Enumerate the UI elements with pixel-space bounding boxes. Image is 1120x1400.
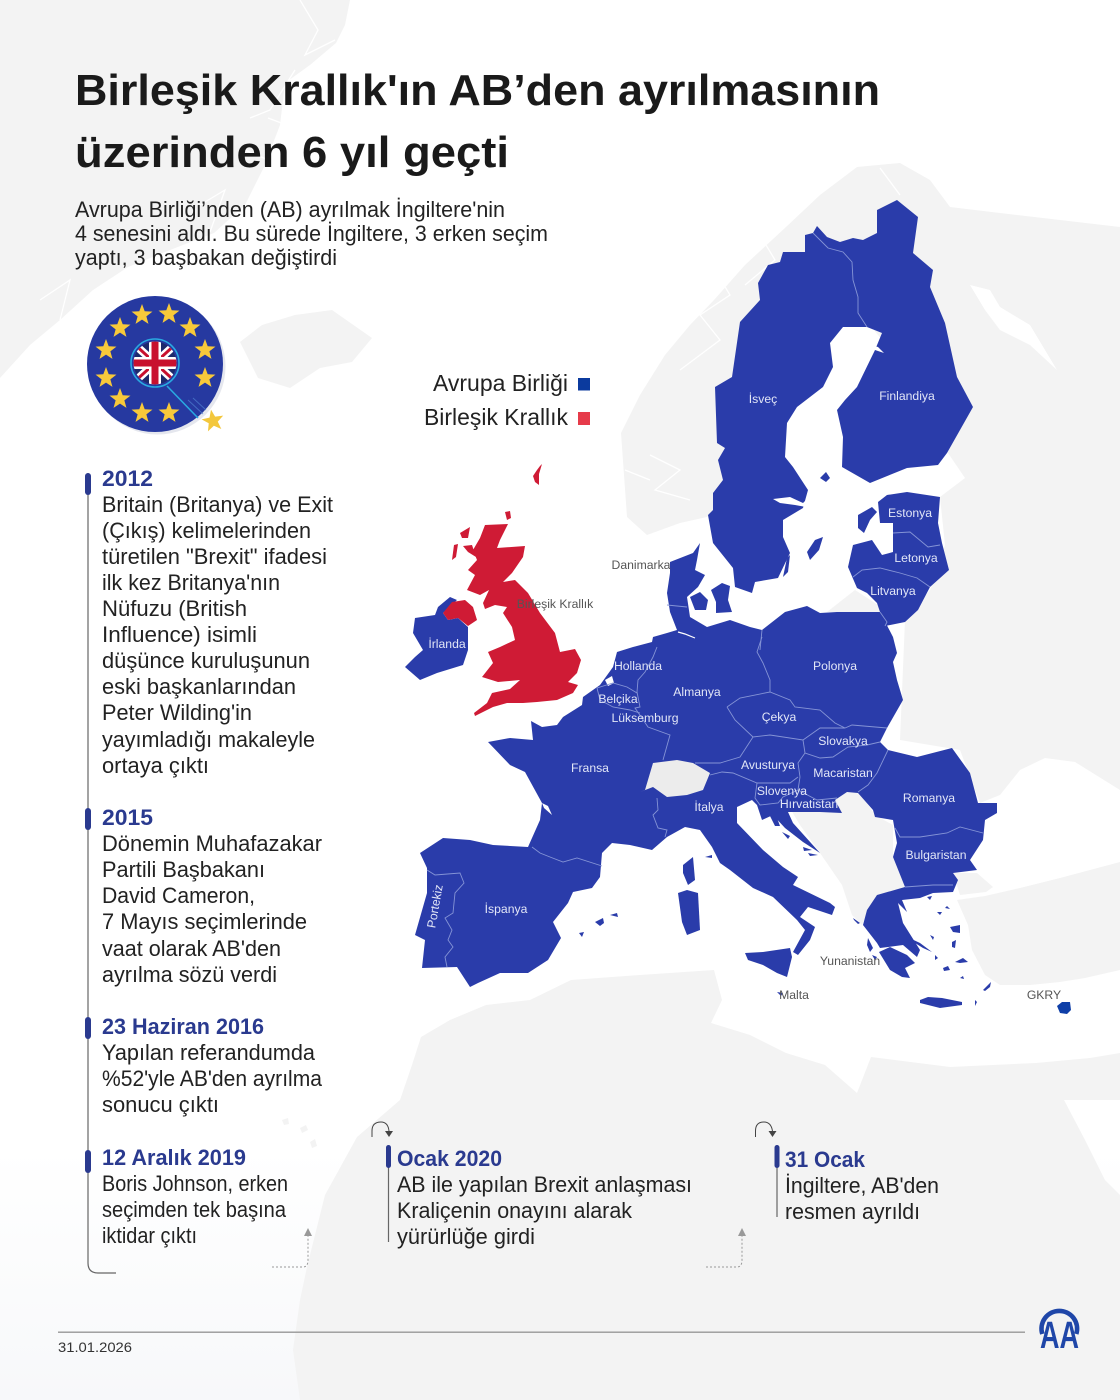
map: country labels: Almanya (673, 685, 721, 699)
map: country labels: Slovenya (757, 784, 807, 798)
map: country labels: Macaristan (813, 766, 873, 780)
timeline item: Ocak 2020: AB ile yapılan Brexit anlaşması (397, 1172, 692, 1197)
timeline item: 2012: ilk kez Britanya'nın (102, 570, 280, 595)
timeline item: 2015: Dönemin Muhafazakar (102, 831, 322, 856)
map: country labels: Portekiz (424, 883, 446, 929)
map: country labels: Birleşik Krallık (517, 597, 594, 611)
title: Birleşik Krallık'ın AB’den ayrılmasının (75, 66, 880, 115)
arrow: curved to Ocak 2020 (372, 1122, 393, 1137)
timeline item: 2012: (Çıkış) kelimelerinden (102, 518, 311, 543)
timeline item: Ocak 2020: Ocak 2020 (397, 1146, 502, 1171)
map: Switzerland (640, 760, 710, 797)
map: Northern Ireland (443, 600, 477, 626)
intro text: yaptı, 3 başbakan değiştirdi (75, 245, 337, 270)
timeline item: 2015: Partili Başbakanı (102, 857, 265, 882)
timeline item: 2012 (85, 466, 333, 778)
map: country labels: Romanya (903, 791, 955, 805)
timeline item: 2012: düşünce kuruluşunun (102, 648, 310, 673)
timeline item: 2012: Nüfuzu (British (102, 596, 247, 621)
map: country labels: İsveç (749, 392, 777, 406)
map: country labels (424, 389, 1061, 1002)
timeline item: 23 Haziran 2016 (85, 1014, 323, 1117)
timeline item: 2012: Peter Wilding'in (102, 700, 252, 725)
map: Baltic states (848, 492, 949, 626)
logo: AA: AA (1040, 1315, 1079, 1357)
timeline item: 23 Haziran 2016: 23 Haziran 2016 (102, 1014, 264, 1039)
timeline item: 2012: Britain (Britanya) ve Exit (102, 492, 333, 517)
map: country labels: Hırvatistan (780, 797, 838, 811)
intro text: 4 senesini aldı. Bu sürede İngiltere, 3 erken seçim (75, 221, 548, 246)
icon: EU flag circle with magnified UK flag (87, 296, 226, 434)
timeline item: 2012: Influence) isimli (102, 622, 257, 647)
timeline item: 2012: yayımladığı makaleyle (102, 727, 315, 752)
map: country labels: İspanya (485, 902, 528, 916)
timeline item: 31 Ocak: resmen ayrıldı (785, 1199, 920, 1224)
legend: Avrupa Birliği (433, 370, 568, 396)
map: country labels: Hollanda (614, 659, 662, 673)
map: United Kingdom (443, 464, 581, 716)
map: country labels: Litvanya (870, 584, 916, 598)
timeline item: 23 Haziran 2016: Yapılan referandumda (102, 1040, 316, 1065)
timeline item: 2015 (85, 805, 322, 987)
timeline item: 23 Haziran 2016: %52'yle AB'den ayrılma (102, 1066, 323, 1091)
timeline item: 2015: vaat olarak AB'den (102, 936, 281, 961)
map: country labels: Slovakya (818, 734, 868, 748)
arrow: curved to 31 Ocak (756, 1122, 776, 1137)
map: country labels: Letonya (894, 551, 938, 565)
timeline rail (88, 473, 116, 1273)
timeline item: 31 Ocak: İngiltere, AB'den (785, 1173, 939, 1198)
timeline item: Ocak 2020: Kraliçenin onayını alarak (397, 1198, 633, 1223)
map: EU islands (579, 472, 1071, 1014)
timeline item: 12 Aralık 2019: Boris Johnson, erken (102, 1171, 288, 1196)
map: country borders (427, 233, 983, 967)
map: country labels: Fransa (571, 761, 609, 775)
map: country labels: Bulgaristan (906, 848, 966, 862)
timeline item: 31 Ocak: 31 Ocak (785, 1147, 866, 1172)
footer rule (58, 1332, 1025, 1333)
map: Shetland Orkney Hebrides (533, 464, 542, 485)
timeline item: 2015: 7 Mayıs seçimlerinde (102, 909, 307, 934)
timeline item: 12 Aralık 2019: seçimden tek başına (102, 1197, 287, 1222)
arrow: dotted connector to 31 Ocak (706, 1228, 746, 1267)
legend: Birleşik Krallık (424, 404, 568, 430)
timeline item: 12 Aralık 2019: 12 Aralık 2019 (102, 1145, 246, 1170)
map: country labels: Danimarka (612, 558, 671, 572)
timeline item: 2015: David Cameron, (102, 883, 255, 908)
intro text: Avrupa Birliği’nden (AB) ayrılmak İngiltere'nin (75, 197, 505, 222)
map: Ireland (405, 597, 468, 680)
map: Sweden and Finland (708, 200, 973, 593)
map: country labels: Estonya (888, 506, 932, 520)
timeline item: 2012: 2012 (102, 466, 153, 491)
timeline item: 12 Aralık 2019: iktidar çıktı (102, 1223, 197, 1248)
map: country labels: GKRY (1027, 988, 1061, 1002)
timeline item: 2012: eski başkanlarından (102, 674, 296, 699)
title (75, 66, 880, 177)
timeline item: 23 Haziran 2016: sonucu çıktı (102, 1092, 219, 1117)
map: country labels: Çekya (762, 710, 796, 724)
map: country labels: Finlandiya (879, 389, 935, 403)
map: country labels: İtalya (694, 800, 724, 814)
title: üzerinden 6 yıl geçti (75, 128, 509, 177)
footer date: 31.01.2026 (58, 1339, 132, 1355)
map: country labels: Belçika (598, 692, 638, 706)
map: Great Britain (467, 524, 581, 716)
timeline item: Ocak 2020: yürürlüğe girdi (397, 1224, 535, 1249)
map: country labels: Malta (779, 988, 809, 1002)
map: country labels: İrlanda (428, 637, 466, 651)
timeline item: 31 Ocak (774, 1145, 939, 1224)
map: country labels: Avusturya (741, 758, 795, 772)
timeline item: 2015: ayrılma sözü verdi (102, 962, 277, 987)
map: EU member states (405, 200, 1071, 1014)
arrow: dotted connector to Ocak 2020 (272, 1228, 312, 1267)
map: continental EU (415, 543, 997, 987)
intro text (75, 197, 548, 270)
timeline item: 2012: türetilen "Brexit" ifadesi (102, 544, 327, 569)
timeline item: 12 Aralık 2019 (85, 1145, 288, 1248)
map: country labels: Polonya (813, 659, 857, 673)
timeline item: 2012: ortaya çıktı (102, 753, 209, 778)
map: lakes and inlets (542, 345, 884, 815)
map: country labels: Yunanistan (820, 954, 880, 968)
timeline item: Ocak 2020 (386, 1145, 692, 1249)
map: country labels: Lüksemburg (611, 711, 679, 725)
logo: AA (1040, 1311, 1079, 1357)
timeline item: 2015: 2015 (102, 805, 153, 830)
legend (424, 370, 590, 430)
